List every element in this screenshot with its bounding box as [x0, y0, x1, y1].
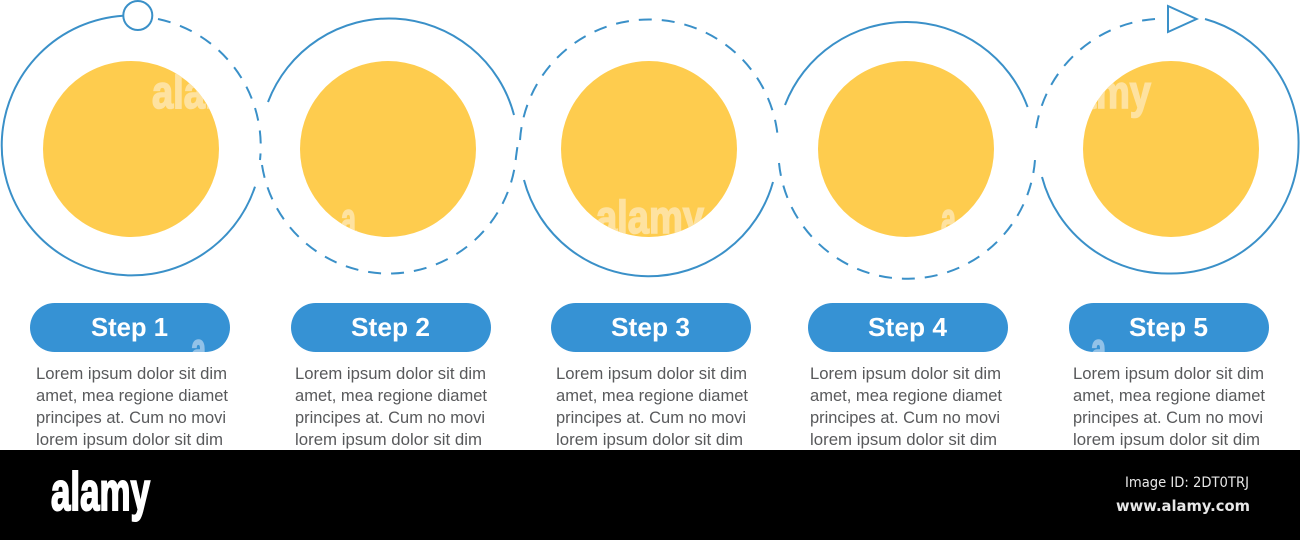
watermark on step 1 disc: alamy	[152, 66, 260, 118]
panel: step 3	[520, 20, 778, 449]
step 5 body text	[1073, 364, 1265, 449]
step 4 body text: principes at. Cum no movi	[810, 408, 1000, 427]
step 3 label pill: Step 3	[611, 314, 690, 342]
step 5 label pill: Step 5	[1129, 314, 1208, 342]
step 3 body text: lorem ipsum dolor sit dim	[556, 430, 743, 449]
panel: step 2	[262, 18, 518, 449]
step 4 body text: Lorem ipsum dolor sit dim	[810, 364, 1001, 383]
ring: step 1 dashed arc	[158, 19, 261, 160]
ring: step 5 dashed arc	[1035, 19, 1155, 137]
step 2 label pill	[291, 303, 491, 352]
image placeholder: step 3 yellow disc	[561, 61, 737, 237]
step 2 body text: principes at. Cum no movi	[295, 408, 485, 427]
step 5 body text: Lorem ipsum dolor sit dim	[1073, 364, 1264, 383]
step 1 label pill: a	[191, 323, 206, 375]
watermark on step 3 disc: alamy	[596, 191, 704, 243]
step 5 label pill	[1069, 303, 1269, 352]
step 1 body text: amet, mea regione diamet	[36, 386, 228, 405]
image placeholder: step 2 yellow disc	[300, 61, 476, 237]
step 3 body text: principes at. Cum no movi	[556, 408, 746, 427]
step 1 body text: principes at. Cum no movi	[36, 408, 226, 427]
step 1 label pill	[30, 303, 230, 352]
step 1 body text: Lorem ipsum dolor sit dim	[36, 364, 227, 383]
step 2 body text: Lorem ipsum dolor sit dim	[295, 364, 486, 383]
step 4 label pill	[808, 303, 1008, 352]
step 4 body text: lorem ipsum dolor sit dim	[810, 430, 997, 449]
step 5 label pill: a	[1091, 323, 1106, 375]
step 1 body text: lorem ipsum dolor sit dim	[36, 430, 223, 449]
step 1 label pill: Step 1	[91, 314, 168, 342]
footer website: www.alamy.com	[1116, 497, 1250, 515]
image placeholder: step 4 yellow disc	[818, 61, 994, 237]
image placeholder: step 5 yellow disc	[1083, 61, 1259, 237]
step 2 body text: amet, mea regione diamet	[295, 386, 487, 405]
ring: step 2 dashed arc	[262, 146, 518, 274]
panel: step 4	[779, 22, 1035, 449]
step 4 body text: amet, mea regione diamet	[810, 386, 1002, 405]
step 4 label pill: Step 4	[868, 314, 948, 342]
step 2 body text	[295, 364, 487, 449]
ring: step 3 solid arc	[524, 180, 773, 276]
watermark on step 5 disc: alamy	[1043, 66, 1151, 118]
ring: step 3 dashed arc	[520, 20, 778, 140]
step 3 body text	[556, 364, 748, 449]
step 4 body text	[810, 364, 1002, 449]
step 5 body text: lorem ipsum dolor sit dim	[1073, 430, 1260, 449]
ring: step 1 solid arc	[2, 16, 255, 275]
watermark on step 2 disc: a	[341, 193, 356, 245]
footer bar	[0, 450, 1300, 540]
ring: step 5 solid arc	[1042, 19, 1299, 274]
icon: start marker circle	[123, 1, 152, 30]
step 3 label pill	[551, 303, 751, 352]
step 5 body text: principes at. Cum no movi	[1073, 408, 1263, 427]
step 2 label pill: Step 2	[351, 314, 430, 342]
footer logo: alamy	[51, 462, 150, 522]
footer image id: Image ID: 2DT0TRJ	[1125, 475, 1249, 491]
step 3 body text: amet, mea regione diamet	[556, 386, 748, 405]
watermark on step 4 disc: a	[941, 193, 956, 245]
step 5 body text: amet, mea regione diamet	[1073, 386, 1265, 405]
ring: step 4 dashed arc	[779, 160, 1035, 279]
panel: step 5	[1035, 6, 1299, 449]
step 2 body text: lorem ipsum dolor sit dim	[295, 430, 482, 449]
step 1 body text	[36, 364, 228, 449]
ring: step 2 solid arc	[268, 18, 514, 115]
step 3 body text: Lorem ipsum dolor sit dim	[556, 364, 747, 383]
image placeholder: step 1 yellow disc	[43, 61, 219, 237]
icon: end arrow triangle	[1168, 6, 1197, 32]
ring: step 4 solid arc	[785, 22, 1028, 107]
panel: step 1	[2, 1, 261, 449]
